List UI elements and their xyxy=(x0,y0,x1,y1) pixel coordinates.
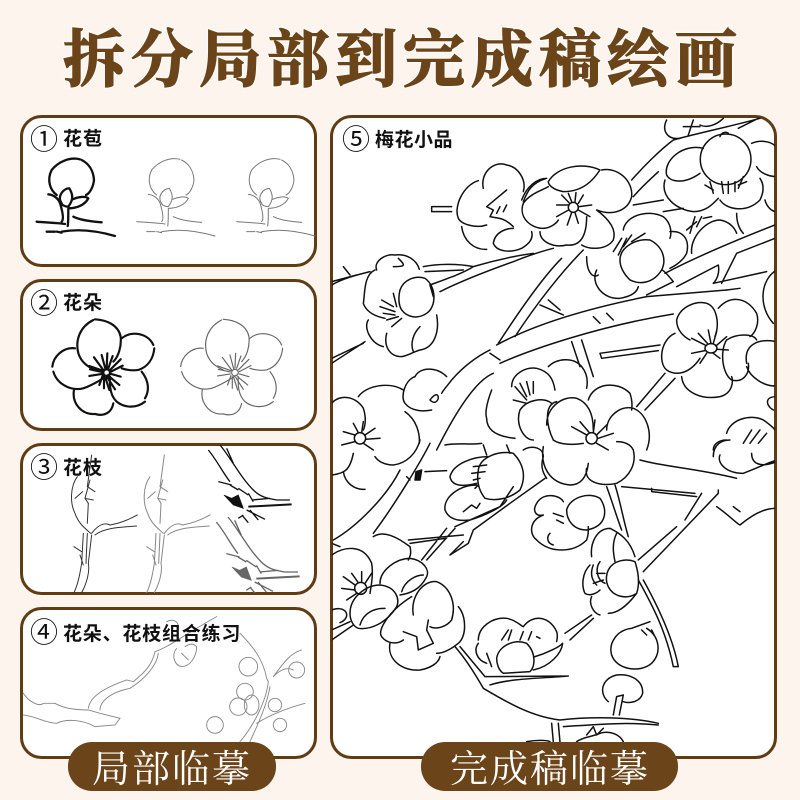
label: 3 branch: 花枝 xyxy=(63,457,103,479)
left main branch lower xyxy=(332,443,482,547)
panel: flower bud xyxy=(22,116,316,266)
title: 拆分局部到完成稿绘画 xyxy=(63,26,737,95)
flower M xyxy=(381,582,465,670)
lower branch xyxy=(455,647,658,742)
flower G xyxy=(332,369,447,450)
label: 3 branch: ③ xyxy=(30,446,58,486)
small bud on lower branch xyxy=(603,675,643,715)
label: 5 plum blossom piece xyxy=(342,118,453,158)
flower B xyxy=(522,166,632,248)
illustration: plum blossom line art xyxy=(332,118,777,742)
label: 2 flower: 花朵 xyxy=(63,292,103,314)
label: 2 flower xyxy=(30,282,103,322)
right twigs xyxy=(647,225,775,295)
label: 3 branch xyxy=(30,446,103,486)
title: 拆分局部到完成稿绘画 xyxy=(63,26,737,95)
pill: finished copy xyxy=(421,742,678,791)
icon: bud tracing two xyxy=(237,159,315,236)
icon: bud drawing dark xyxy=(37,159,115,236)
flower I xyxy=(408,445,545,560)
flower G lower xyxy=(332,440,420,489)
flower D xyxy=(363,255,438,357)
flower A xyxy=(457,164,532,251)
label: 1 flower bud: ① xyxy=(30,118,58,158)
pill: partial copy xyxy=(68,742,276,791)
flower E xyxy=(587,213,743,298)
upper branches xyxy=(332,118,760,363)
icon: flower tracing xyxy=(181,319,283,415)
label: 4 flower and branch combination practice xyxy=(30,611,241,651)
pill: partial copy: 局部临摹 xyxy=(92,749,252,791)
flower K and branches xyxy=(583,440,777,667)
panel: plum blossom piece xyxy=(332,116,777,758)
flower N xyxy=(476,615,593,673)
icon: bud tracing one xyxy=(137,159,215,236)
right edge petals xyxy=(713,270,777,450)
flower J xyxy=(532,495,605,550)
label: 1 flower bud xyxy=(30,118,103,158)
icon: flower drawing dark xyxy=(52,319,154,415)
fruit bud xyxy=(611,622,658,669)
flower C xyxy=(664,118,777,212)
panel: branch xyxy=(22,444,316,595)
flower L xyxy=(332,534,428,640)
pill: finished copy: 完成稿临摹 xyxy=(450,749,650,791)
flower F xyxy=(662,299,777,397)
label: 4 flower and branch combination practice: ④ xyxy=(30,611,58,651)
panel: flower xyxy=(22,280,316,430)
label: 1 flower bud: 花苞 xyxy=(63,128,103,150)
icon: branch drawings xyxy=(71,445,300,595)
label: 2 flower: ② xyxy=(30,282,58,322)
label: 5 plum blossom piece: ⑤ xyxy=(342,118,370,158)
label: 4 flower and branch combination practice: 花朵、花枝组合练习 xyxy=(63,622,241,645)
label: 5 plum blossom piece: 梅花小品 xyxy=(375,129,453,151)
icon: flower and branch tracing xyxy=(23,617,305,742)
flower H lower xyxy=(523,440,634,485)
panel: combination practice xyxy=(22,608,316,758)
flower H xyxy=(486,360,649,450)
main branch xyxy=(437,250,727,450)
